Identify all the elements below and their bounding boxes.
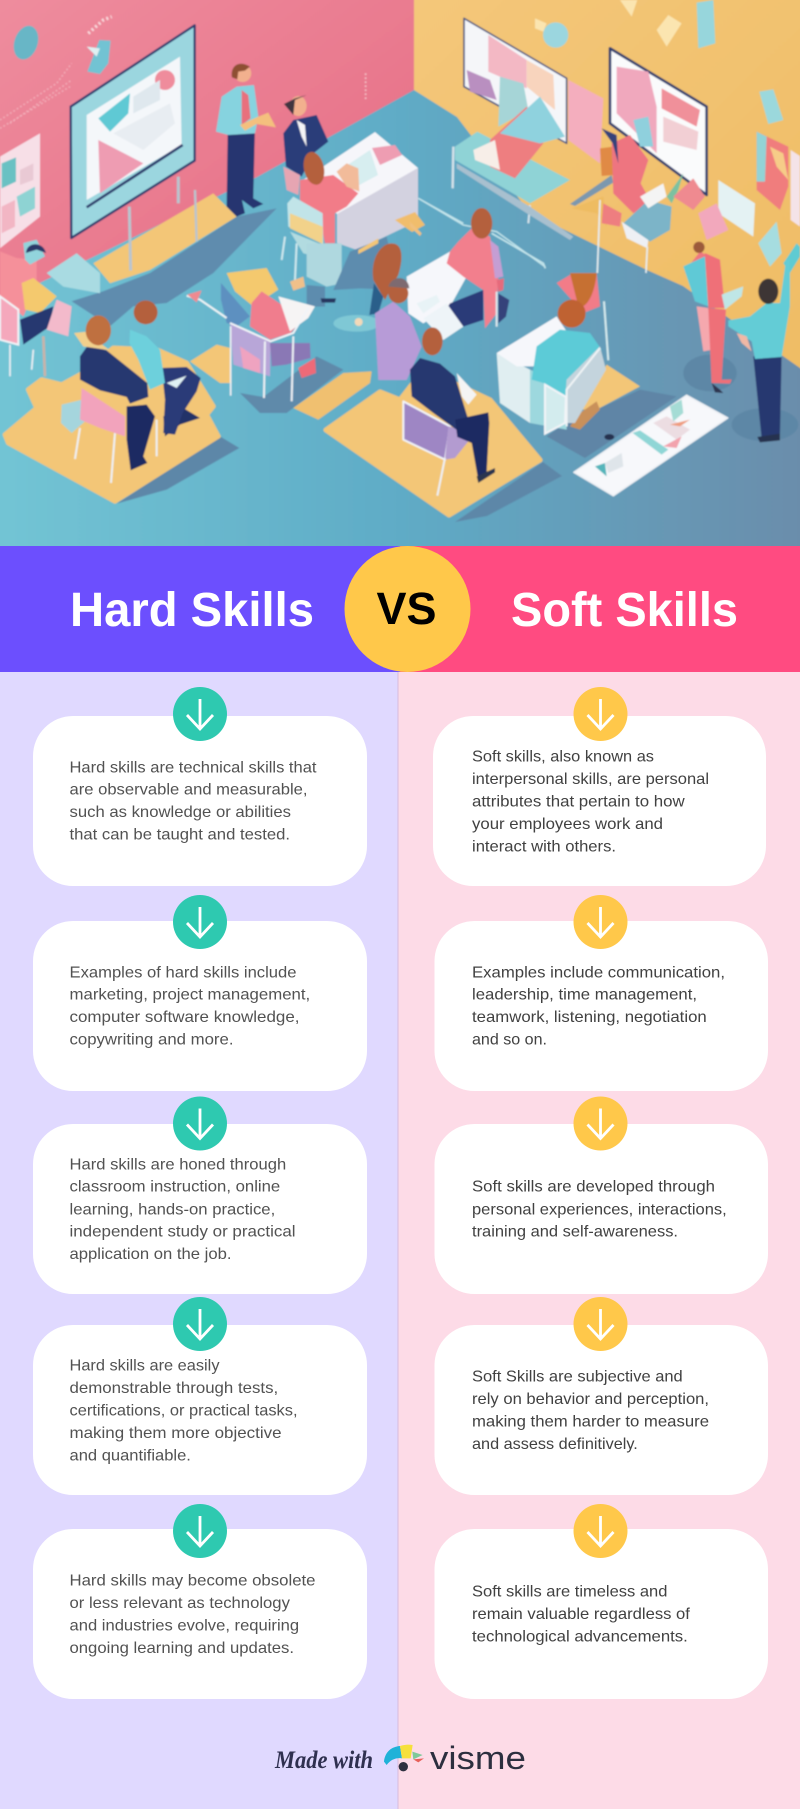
text: demonstrable: and quantifiable. [70,1448,191,1464]
whiteboard with diagrams [71,25,197,271]
group by chair and centre table [282,198,545,380]
woman at desk with chair [287,150,359,263]
man in teal shirt pointing at wall [728,260,790,442]
rug: middle [190,345,372,420]
text: definition: Soft skills, also known as [472,749,654,766]
text: timeless: remain valuable regardless of [472,1606,690,1623]
soft skills card 3 [434,1096,768,1294]
text: obsolescence [70,1573,316,1657]
text: demonstrable: demonstrable through tests, [70,1380,278,1397]
teal shirt person front left [129,300,201,436]
text: definition: interpersonal skills, are personal [472,771,709,788]
icon: down arrow [574,1297,628,1351]
footer: made with visme [274,1740,526,1776]
icon: down arrow [574,1096,628,1150]
footer: made with visme: visme [430,1740,526,1776]
icon: down arrow [574,895,628,949]
text: demonstrable [70,1358,298,1464]
footer: made with visme: Made with [274,1747,373,1774]
text: obsolescence: or less relevant as technology [70,1595,290,1612]
text: how developed [70,1156,296,1263]
text: how developed: independent study or practical [70,1224,296,1241]
icon: down arrow [173,1504,227,1558]
header banner [0,546,800,672]
left column background [0,672,398,1809]
table and teal shirt woman front right [497,273,608,434]
text: how developed: learning, hands-on practice, [70,1201,275,1218]
left wall poster [0,133,40,248]
hard skills card 4 [33,1297,367,1495]
hard skills card 2 [33,895,367,1091]
soft skills card 2 [434,895,768,1091]
text: how developed [472,1179,727,1241]
text: how developed: classroom instruction, online [70,1179,280,1196]
text: definition: that can be taught and tested. [70,826,290,844]
presenter in teal shirt [216,64,276,217]
text: subjective: Soft Skills are subjective and [472,1369,683,1386]
text: demonstrable: certifications, or practical tasks, [70,1402,298,1420]
text: subjective [472,1369,709,1453]
text: subjective: making them harder to measure [472,1414,709,1430]
text: definition [472,749,709,856]
VS circle: VS [376,583,436,634]
icon: down arrow [173,1096,227,1150]
icon: down arrow [574,1504,628,1558]
text: examples: computer software knowledge, [70,1009,300,1026]
text: examples: copywriting and more. [70,1031,234,1048]
text: definition [70,759,317,844]
floor lines by bench [418,198,545,268]
icon: visme logo [384,1745,424,1771]
text: timeless: technological advancements. [472,1628,688,1646]
icon: down arrow [173,687,227,741]
seated man with navy jacket [283,95,328,195]
text: examples: and so on. [472,1031,547,1048]
text: obsolescence: and industries evolve, requiring [70,1618,299,1634]
wall doodles: globe and figure [0,17,366,128]
rug: front centre [326,369,562,522]
text: how developed: Hard skills are honed through [70,1156,286,1173]
soft skills card 4 [434,1297,768,1495]
right column background [398,672,800,1809]
hard skills card 3 [33,1096,367,1294]
hard skills card 5 [33,1504,367,1699]
soft skills card 1 [433,687,766,886]
text: subjective: and assess definitively. [472,1436,638,1453]
text: obsolescence: Hard skills may become obsolete [70,1573,316,1590]
text: definition: attributes that pertain to how [472,794,685,810]
text: how developed: personal experiences, interactions, [472,1201,727,1218]
hard skills card 1 [33,687,367,886]
left wall strip and shadow [47,193,277,326]
text: how developed: Soft skills are developed through [472,1179,715,1196]
icon: down arrow [173,1297,227,1351]
text: demonstrable: making them more objective [70,1425,282,1442]
text: definition: are observable and measurable, [70,782,308,799]
soft skills card 5 [434,1504,768,1699]
desk behind presenter [300,132,425,250]
navy suit man front left with pink chair [61,315,157,483]
text: timeless: Soft skills are timeless and [472,1584,667,1601]
left seated woman [0,240,72,376]
presentation boards on yellow wall [464,18,707,195]
text: examples: marketing, project management, [70,987,310,1004]
hero illustration: isometric classroom [0,0,800,546]
text: definition: such as knowledge or abilities [70,804,291,821]
text: examples [70,964,310,1048]
VS circle [344,546,470,672]
yellow wall and floor [414,0,800,375]
text: demonstrable: Hard skills are easily [70,1358,220,1375]
text: definition: your employees work and [472,816,663,833]
icon: down arrow [173,895,227,949]
navy suit man front centre with lavender chair [403,327,495,496]
text: subjective: rely on behavior and perception, [472,1391,709,1408]
text: how developed: training and self-awareness. [472,1224,678,1241]
centre seated woman with chair [187,268,316,401]
pink wall [0,0,414,307]
rug: front left [5,348,239,504]
heading: Soft Skills: Soft Skills [511,584,738,637]
text: definition: interact with others. [472,838,616,856]
text: timeless [472,1584,690,1646]
heading: Hard Skills: Hard Skills [70,584,314,637]
white report sheet on the floor [574,395,728,496]
text: examples: Examples include communication, [472,964,725,981]
text: examples: teamwork, listening, negotiation [472,1009,707,1026]
text: definition: Hard skills are technical skills that [70,759,317,776]
person in red trousers [683,253,743,393]
icon: down arrow [574,687,628,741]
text: obsolescence: ongoing learning and updates. [70,1640,294,1657]
woman at yellow wall with chair [570,128,705,273]
text: examples: Examples of hard skills include [70,964,297,981]
bench with coloured shapes [453,97,573,240]
text: examples: leadership, time management, [472,987,697,1004]
text: how developed: application on the job. [70,1246,232,1263]
rug: right and wall strip [547,355,798,458]
scattered papers and posters on yellow wall [535,0,800,273]
text: examples [472,964,725,1048]
